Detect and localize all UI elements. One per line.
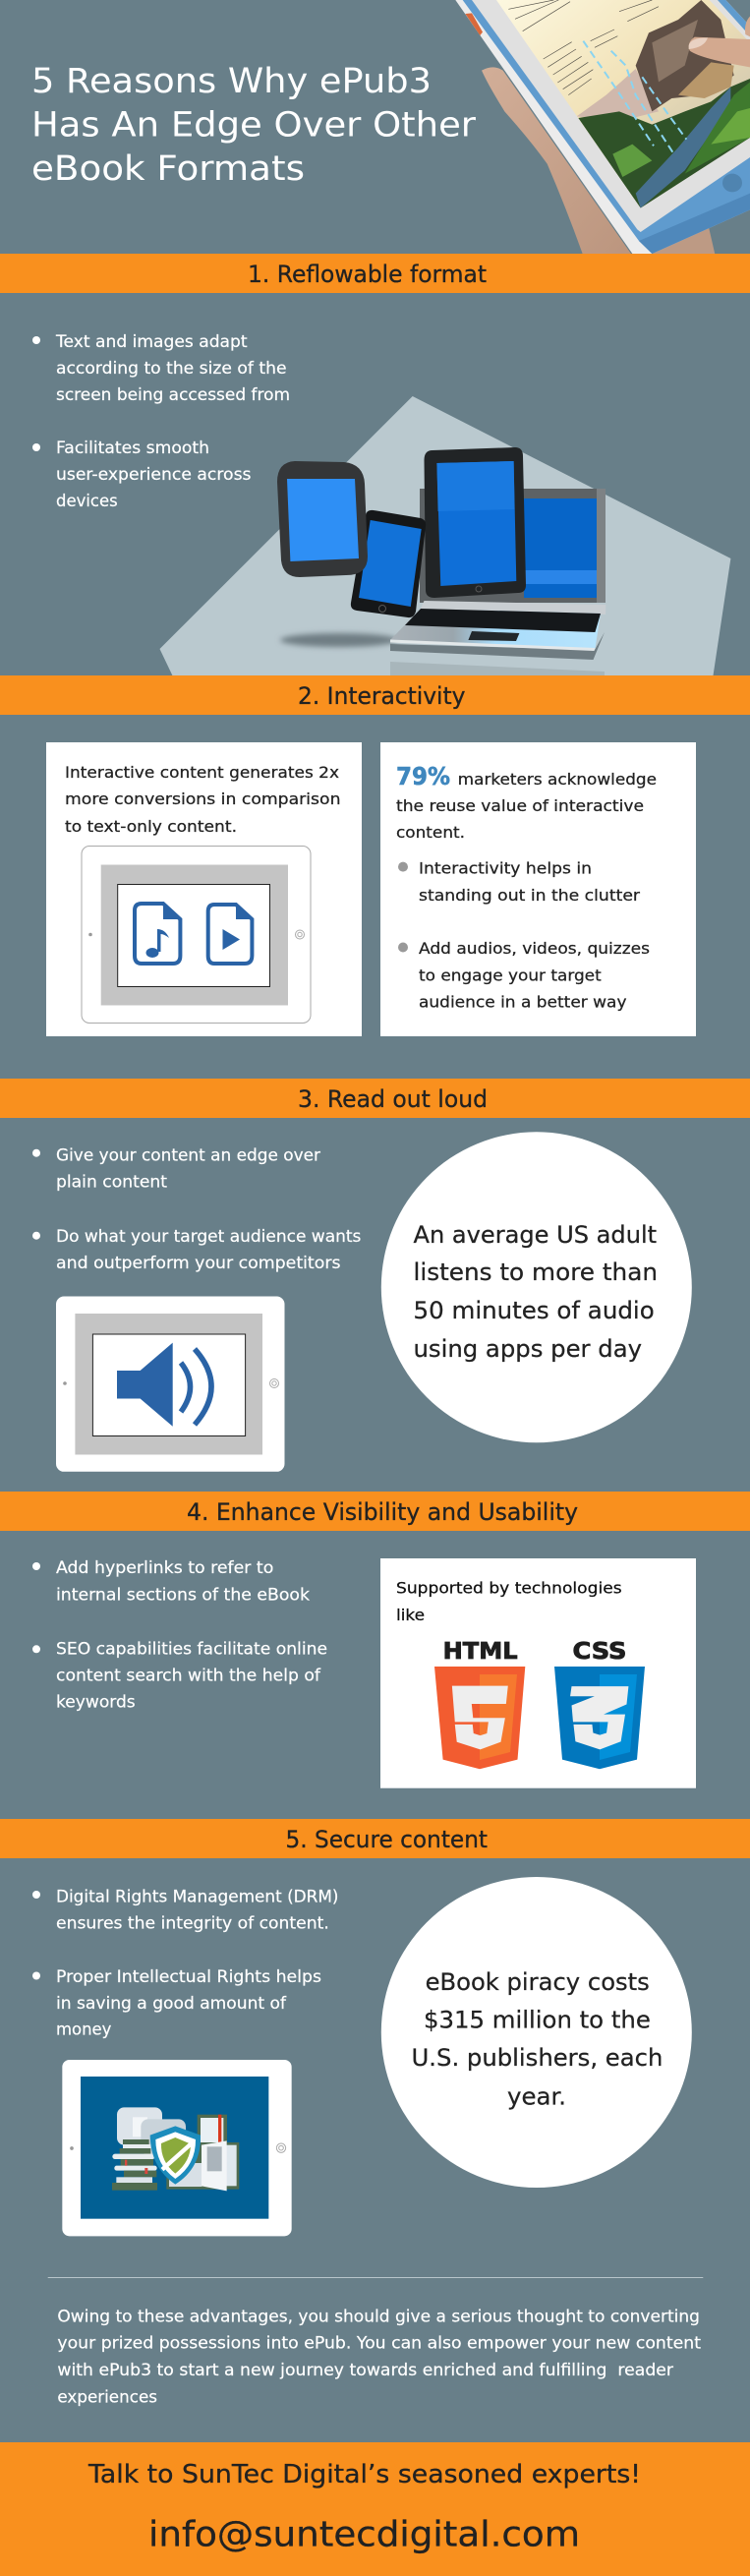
panel: supported technologies: like	[396, 1606, 425, 1624]
panel: supported technologies: Supported by technologies	[396, 1579, 622, 1598]
callout circle: audio listening stat: listens to more than	[413, 1259, 658, 1286]
conclusion text block: experiences	[57, 2387, 157, 2406]
panel: 79% marketers card: standing out in the clutter	[419, 886, 640, 905]
stat: 79%: 79%	[396, 762, 450, 790]
panel: 79% marketers card	[380, 742, 696, 1036]
laptop	[390, 489, 606, 651]
callout circle: ebook piracy stat	[381, 1877, 692, 2188]
panel: 79% marketers card: the reuse value of interactive	[396, 796, 644, 815]
section 4 heading bar	[0, 1492, 750, 1531]
icon: CSS3 shield	[554, 1639, 645, 1769]
callout circle: audio listening stat: 50 minutes of audio	[413, 1297, 655, 1324]
section 1 bullet list: Facilitates smooth	[56, 439, 209, 457]
section 5 bullet list: Digital Rights Management (DRM)	[56, 1888, 338, 1905]
panel: 79% marketers card: marketers acknowledge	[458, 770, 657, 789]
callout circle: audio listening stat	[381, 1132, 692, 1442]
section 4 bullet list: SEO capabilities facilitate online	[56, 1639, 327, 1658]
section 3 heading bar	[0, 1079, 750, 1118]
section 1 bullet list: Text and images adapt	[55, 332, 248, 351]
section 1 bullet list: user-experience across	[56, 465, 251, 484]
section 1 heading bar	[0, 254, 750, 293]
section 1 bullet list: screen being accessed from	[56, 385, 290, 404]
section 3 bullet list: Give your content an edge over	[56, 1146, 320, 1164]
section 4 heading bar: 4. Enhance Visibility and Usability	[187, 1498, 578, 1526]
callout circle: ebook piracy stat: $315 million to the	[424, 2006, 651, 2033]
panel: conversions card: to text-only content.	[65, 817, 237, 836]
panel: 79% marketers card: content.	[396, 823, 465, 842]
section 5 bullet list: ensures the integrity of content.	[56, 1913, 329, 1933]
conclusion text block	[57, 2307, 702, 2406]
section 5 bullet list: in saving a good amount of	[56, 1994, 287, 2013]
section 4 bullet list: internal sections of the eBook	[56, 1585, 310, 1604]
hero image: hand holding tablet	[455, 0, 750, 256]
large tablet	[425, 447, 526, 598]
callout circle: audio listening stat: An average US adult	[413, 1221, 657, 1249]
icon: HTML5 shield: HTML	[443, 1639, 518, 1665]
section 5 bullet list: Proper Intellectual Rights helps	[56, 1967, 321, 1986]
illustration: multi-device group on light polygon	[159, 396, 730, 675]
footer call to action: info@suntecdigital.com	[148, 2514, 580, 2554]
conclusion text block: your prized possessions into ePub. You can also empower your new content	[57, 2333, 702, 2352]
title: Has An Edge Over Other	[31, 106, 477, 146]
section 5 heading bar: 5. Secure content	[285, 1826, 488, 1853]
footer call to action: Talk to SunTec Digital’s seasoned experts!	[87, 2460, 641, 2489]
icon: tablet with secured books	[62, 2060, 292, 2236]
callout circle: audio listening stat: using apps per day	[413, 1335, 642, 1363]
section 1 bullet list: devices	[56, 492, 118, 510]
section 4 bullet list	[32, 1558, 327, 1711]
title	[31, 62, 477, 189]
panel: 79% marketers card: Interactivity helps in	[419, 859, 592, 878]
section 4 bullet list: content search with the help of	[56, 1666, 321, 1685]
section 1 bullet list: according to the size of the	[56, 359, 287, 378]
panel: 79% marketers card: audience in a better way	[419, 993, 627, 1012]
panel: conversions card: Interactive content generates 2x	[65, 763, 339, 782]
section 3 heading bar: 3. Read out loud	[298, 1085, 488, 1113]
section 5 heading bar	[0, 1819, 750, 1858]
panel: 79% marketers card: to engage your target	[419, 966, 602, 985]
panel: supported technologies	[380, 1558, 696, 1788]
section 1 bullet list	[32, 332, 290, 510]
title: 5 Reasons Why ePub3	[31, 62, 432, 101]
section 5 bullet list: money	[56, 2020, 112, 2039]
callout circle: ebook piracy stat: U.S. publishers, each	[411, 2044, 663, 2072]
icon: CSS3 shield: CSS	[572, 1639, 627, 1665]
section 3 bullet list: and outperform your competitors	[56, 1254, 340, 1272]
conclusion text block: with ePub3 to start a new journey towards enriched and fulfilling reader	[57, 2361, 673, 2379]
footer call to action	[0, 2442, 750, 2576]
icon: tablet with speaker	[56, 1296, 285, 1472]
panel: 79% marketers card: Add audios, videos, quizzes	[419, 939, 650, 958]
section 3 bullet list: plain content	[56, 1172, 168, 1192]
section 5 bullet list	[32, 1888, 338, 2039]
section 2 heading bar: 2. Interactivity	[298, 682, 466, 710]
small tablet	[277, 461, 368, 577]
phone	[351, 510, 426, 617]
title: eBook Formats	[31, 149, 305, 189]
icon: HTML5 shield	[434, 1639, 525, 1769]
panel: conversions card: more conversions in comparison	[65, 790, 340, 808]
panel: conversions card	[46, 742, 362, 1036]
icon: tablet with audio and video files	[82, 846, 311, 1023]
section 4 bullet list: Add hyperlinks to refer to	[56, 1558, 273, 1577]
section 3 bullet list	[32, 1146, 361, 1272]
callout circle: ebook piracy stat: eBook piracy costs	[426, 1968, 650, 1996]
callout circle: ebook piracy stat: year.	[507, 2083, 566, 2111]
section 1 heading bar: 1. Reflowable format	[248, 261, 487, 288]
conclusion text block: Owing to these advantages, you should give a serious thought to converting	[57, 2307, 700, 2325]
section 2 heading bar	[0, 675, 750, 715]
section 3 bullet list: Do what your target audience wants	[56, 1227, 361, 1246]
section 4 bullet list: keywords	[56, 1693, 136, 1711]
